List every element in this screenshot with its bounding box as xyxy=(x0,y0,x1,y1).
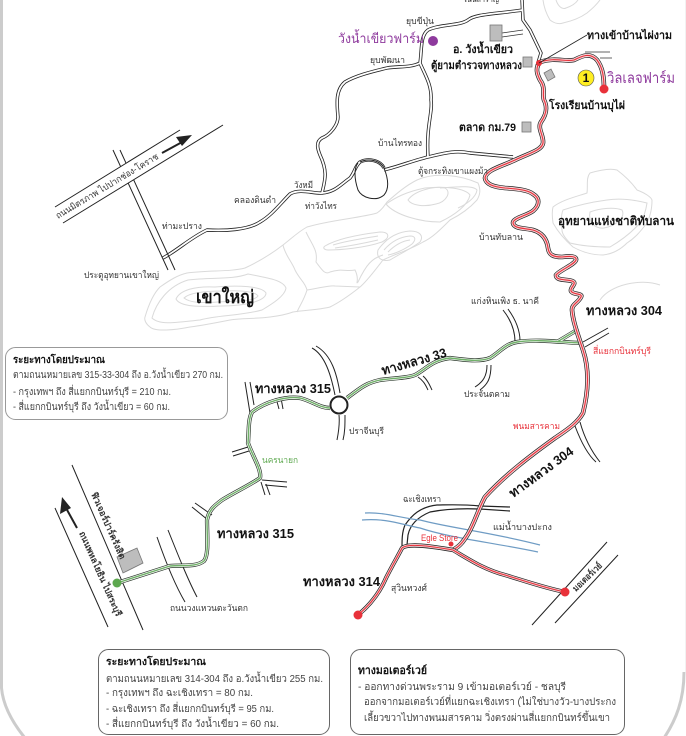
labels: small places: แก่งหินเพิง ธ. นาคี xyxy=(471,296,539,306)
labels: Khao Yai area: ถนนมิตรภาพ ไปปากช่อง-โคราช xyxy=(54,151,160,221)
panel: distance via 315-33-304: ระยะทางโดยประมาณ xyxy=(13,353,106,366)
labels: Khao Yai area: เขาใหญ่ xyxy=(196,286,254,308)
labels: north area: ตลาด กม.79 xyxy=(459,122,516,134)
red route: highway 304 to farm xyxy=(358,55,604,615)
river: Bang Pakong xyxy=(362,513,540,552)
labels: north area: ตู้จกระทิงเขาแผงม้า xyxy=(418,166,488,177)
labels: small places: นครนายก xyxy=(262,455,298,465)
panel: distance via 314-304: ตามถนนหมายเลข 314-304 ถึง อ.วังน้ำเขียว 255 กม. xyxy=(106,671,323,685)
labels: north area: ยุบพัฒนา xyxy=(370,55,405,66)
panel: distance via 314-304: ระยะทางโดยประมาณ xyxy=(106,655,207,668)
labels: north area: ทางเข้าบ้านไผ่งาม xyxy=(587,28,672,42)
labels: small places: ปราจีนบุรี xyxy=(349,426,384,437)
panel: distance via 315-33-304: - สี่แยกกบินทร์บุรี ถึง วังน้ำเขียว = 60 กม. xyxy=(13,399,170,413)
labels: north area: ยุบขีปุ่น xyxy=(406,16,434,27)
labels: north area: บ้านทับลาน xyxy=(479,232,523,242)
panel: distance via 315-33-304: - กรุงเทพฯ ถึง สี่แยกกบินทร์บุรี = 210 กม. xyxy=(13,384,171,398)
labels: north area: บ้านไทรทอง xyxy=(378,138,422,148)
labels: Khao Yai area: ท่ามะปราง xyxy=(162,221,202,231)
arrow: motorway direction xyxy=(162,135,192,153)
arrow: Phahonyothin direction xyxy=(60,497,77,528)
labels: highways xyxy=(217,303,663,589)
labels: highways: ทางหลวง 315 xyxy=(255,381,331,396)
panel: distance via 315-33-304: ตามถนนหมายเลข 315-33-304 ถึง อ.วังน้ำเขียว 270 กม. xyxy=(13,367,223,381)
labels: north area: วิลเลจฟาร์ม xyxy=(606,70,675,87)
labels: highways: ทางหลวง 33 xyxy=(380,345,448,378)
panel: motorway directions: ออกจากมอเตอร์เวย์ที่แยกฉะเชิงเทรา (ไม่ใช่บางวัว-บางประกง xyxy=(364,694,616,708)
road network (grey double-line roads) xyxy=(55,0,618,630)
panel: distance via 314-304: - ฉะเชิงเทรา ถึง สี่แยกกบินทร์บุรี = 95 กม. xyxy=(106,701,274,715)
labels: Khao Yai area: คลองดินดำ xyxy=(234,195,276,205)
labels: highways: ทางหลวง 315 xyxy=(217,526,294,541)
labels: small places: แม่น้ำบางปะกง xyxy=(493,520,552,532)
panel: distance via 314-304 xyxy=(98,650,330,734)
labels: north area: โรงเรียนบ้านบุไผ่ xyxy=(548,98,625,113)
labels: north area xyxy=(338,0,675,242)
labels: highways: ทางหลวง 314 xyxy=(303,574,381,589)
panel: distance via 315-33-304 xyxy=(6,348,228,420)
panel: distance via 314-304: - กรุงเทพฯ ถึง ฉะเชิงเทรา = 80 กม. xyxy=(106,687,253,699)
roundabout xyxy=(330,396,348,414)
labels: north area: ตู้ยามตำรวจทางหลวง xyxy=(431,59,522,73)
labels: small places: พนมสารคาม xyxy=(513,421,560,431)
green route: highways 315 and 33 xyxy=(117,330,580,583)
panel: motorway directions xyxy=(350,650,624,734)
labels: small places: สุวินทวงศ์ xyxy=(391,582,427,594)
labels: Khao Yai area: ท่าวังไทร xyxy=(305,201,337,211)
labels: small places: ฟิวเจอร์ปาร์ครังสิต xyxy=(89,490,129,561)
labels: small places: Egle Store xyxy=(421,533,458,543)
labels: Khao Yai area xyxy=(54,151,337,308)
labels: small places xyxy=(76,296,651,618)
marker: number 1: 1 xyxy=(583,71,590,85)
buildings xyxy=(117,25,555,573)
panel: motorway directions: - ออกทางด่วนพระราม 9 เข้ามอเตอร์เวย์ - ชลบุรี xyxy=(358,681,567,693)
labels: small places: สี่แยกกบินทร์บุรี xyxy=(593,344,651,357)
hills: Khao Yai and Thap Lan contours xyxy=(145,0,660,330)
labels: north area: วังน้ำเขียวฟาร์ม xyxy=(338,29,424,46)
labels: north area: อ. วังน้ำเขียว xyxy=(453,41,513,56)
labels: Khao Yai area: วังหมี xyxy=(294,180,313,190)
markers xyxy=(112,35,608,620)
panel: distance via 314-304: - สี่แยกกบินทร์บุรี ถึง วังน้ำเขียว = 60 กม. xyxy=(106,716,279,730)
labels: small places: ถนนพหลโยธิน ไปสระบุรี xyxy=(76,529,125,618)
labels: highways: ทางหลวง 304 xyxy=(506,443,577,500)
labels: Khao Yai area: ประตูอุทยานเขาใหญ่ xyxy=(84,270,159,281)
panel: motorway directions: เลี้ยวขวาไปทางพนมสารคาม วิ่งตรงผ่านสี่แยกกบินทร์ขึ้นเขา xyxy=(364,710,610,724)
labels: small places: ฉะเชิงเทรา xyxy=(403,494,441,504)
labels: small places: ถนนวงแหวนตะวันตก xyxy=(170,603,248,613)
labels: small places: มอเตอร์เวย์ xyxy=(570,560,604,593)
labels: small places: ประจันตคาม xyxy=(464,389,510,399)
marker: number 1 xyxy=(578,70,594,86)
panel: motorway directions: ทางมอเตอร์เวย์ xyxy=(358,664,427,677)
labels: north area: อุทยานแห่งชาติทับลาน xyxy=(558,214,675,229)
labels: highways: ทางหลวง 304 xyxy=(586,303,663,318)
